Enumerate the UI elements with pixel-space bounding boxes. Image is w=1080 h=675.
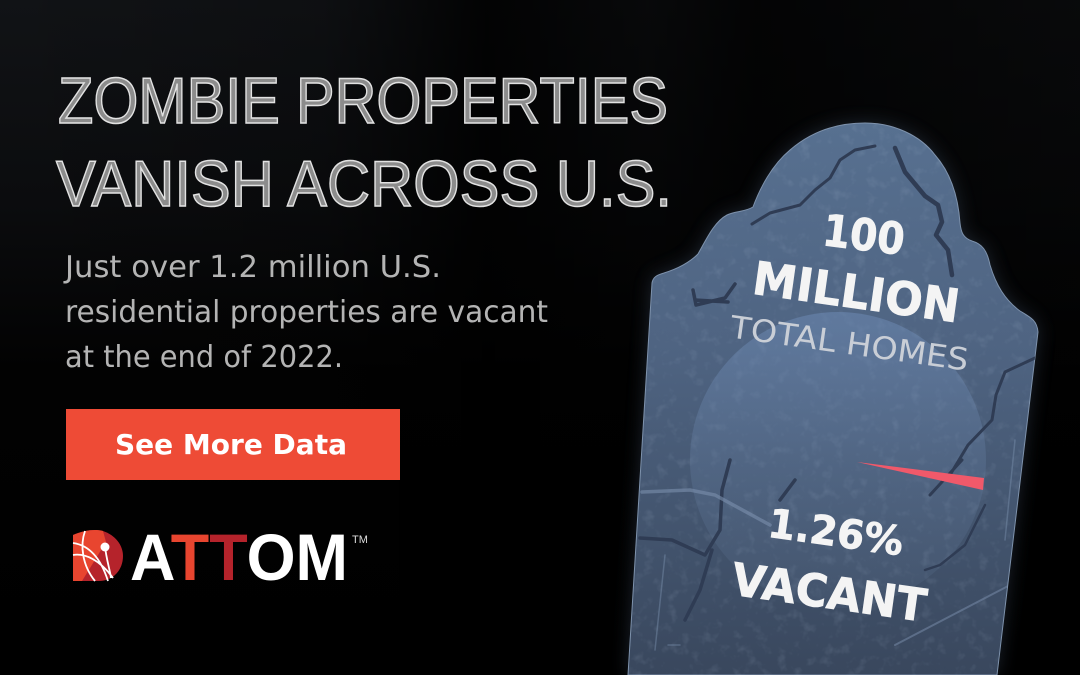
stat: 100 million: 100 [820,205,908,266]
title line 1: ZOMBIE PROPERTIES [58,64,668,137]
button: see more data: See More Data [115,428,347,461]
tombstone glow [628,123,1038,675]
icon: globe mark [73,530,123,581]
wordmark: ATTOM [130,520,348,594]
subtitle text: Just over 1.2 million U.S. [63,250,441,285]
tombstone [620,120,1050,675]
stat: 1.26% vacant [728,501,930,633]
needle: vacant share [857,462,984,490]
title [56,64,672,220]
trademark: TM [352,534,368,546]
stat: 100 million: MILLION [749,251,963,333]
gauge disc [690,312,986,608]
subtitle text: at the end of 2022. [65,340,343,375]
cracks [640,146,1035,620]
stat: 1.26% vacant: VACANT [728,553,930,633]
subtitle text: residential properties are vacant [65,295,548,330]
title line 2: VANISH ACROSS U.S. [56,147,672,220]
stat: 100 million [749,205,963,333]
button: see more data [66,409,400,480]
subtitle text [63,250,548,375]
ATTOM logo [73,520,368,594]
label: total homes: TOTAL HOMES [727,309,971,379]
stat: 1.26% vacant: 1.26% [765,501,906,565]
